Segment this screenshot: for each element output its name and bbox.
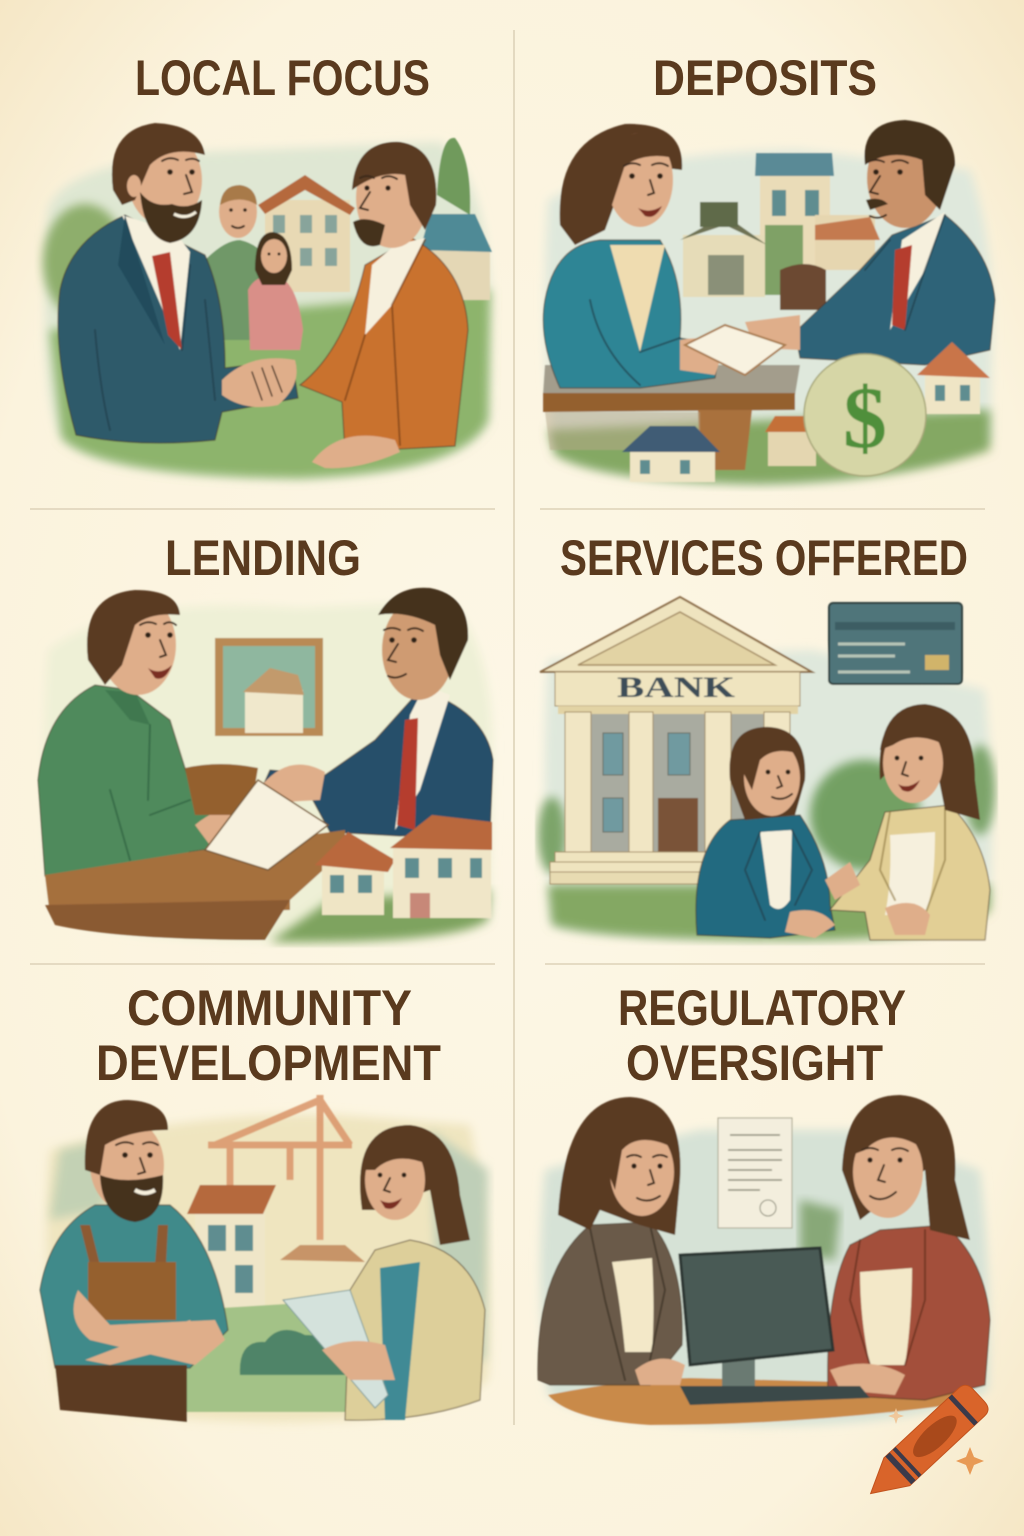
panel: regulatory oversight bbox=[538, 980, 990, 1426]
heading: deposits: DEPOSITS bbox=[653, 50, 877, 106]
heading: regulatory oversight bbox=[618, 980, 906, 1091]
panel: local focus bbox=[43, 50, 492, 478]
heading: local focus: LOCAL FOCUS bbox=[135, 50, 430, 106]
panel: lending bbox=[38, 530, 493, 942]
illustration: borrower and loan officer at desk bbox=[38, 588, 493, 942]
icon: construction crane bbox=[208, 1095, 352, 1240]
illustration: handshake between banker and local client bbox=[43, 123, 492, 478]
icon: credit card bbox=[829, 603, 962, 684]
icon: bank building bbox=[540, 597, 812, 884]
heading: community development: COMMUNITY bbox=[127, 980, 412, 1036]
illustration: shop owner and planner in front of construction bbox=[40, 1095, 490, 1422]
panel: services offered bbox=[538, 530, 995, 940]
illustration: bank building, credit card and two customers bbox=[538, 597, 995, 940]
heading: regulatory oversight: REGULATORY bbox=[618, 980, 906, 1036]
heading: community development bbox=[96, 980, 441, 1091]
icon: framed document bbox=[718, 1118, 792, 1228]
heading: regulatory oversight: OVERSIGHT bbox=[626, 1035, 883, 1091]
panel: deposits bbox=[543, 50, 995, 484]
panel: community development bbox=[40, 980, 490, 1422]
heading: community development: DEVELOPMENT bbox=[96, 1035, 441, 1091]
icon: crayon logo bbox=[859, 1382, 992, 1509]
heading: lending: LENDING bbox=[165, 530, 361, 586]
illustration: two regulators reviewing a monitor bbox=[538, 1095, 990, 1426]
icon: dollar coin: $ bbox=[843, 370, 887, 467]
icon: bank building: BANK bbox=[617, 671, 736, 704]
illustration: depositor handing paper to banker with coin and houses bbox=[543, 120, 995, 484]
